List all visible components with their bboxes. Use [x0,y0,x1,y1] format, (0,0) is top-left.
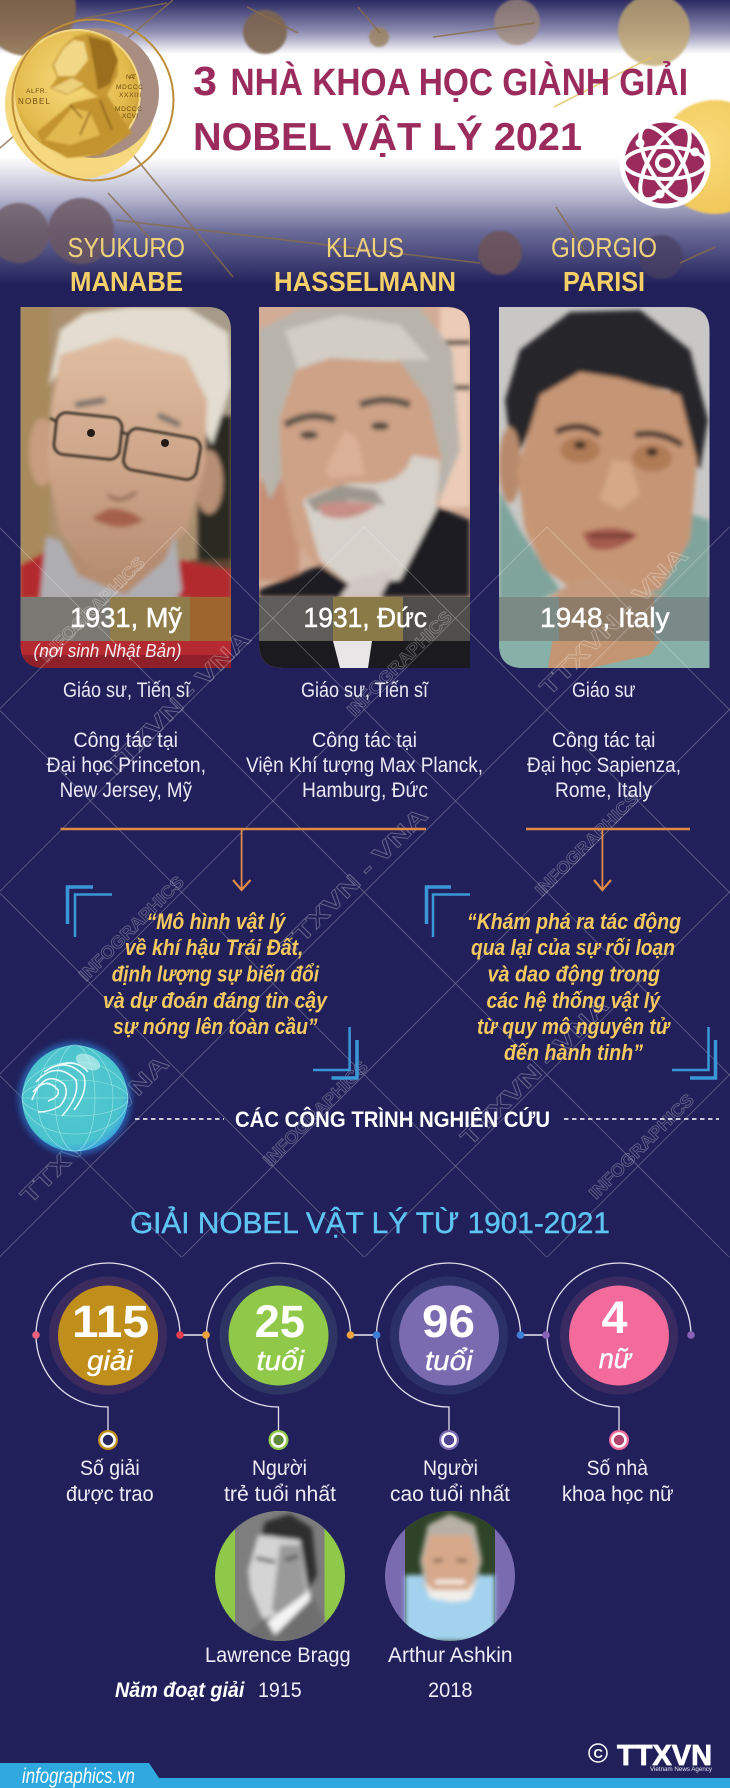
icon: atom [620,118,710,208]
text: INFOGRAPHICS [531,789,642,900]
quote: Parisi citation: đến hành tinh” [504,1040,643,1065]
quote brackets [426,887,716,1078]
stat: oldest 96: tuổi [425,1345,473,1376]
header band with gradient and gold molecules [0,0,730,285]
caption: 2018: 2018 [428,1679,472,1702]
quote: Parisi citation: qua lại của sự rối loạn [471,935,675,960]
text block: Parisi affiliation: Đại học Sapienza, [527,754,681,777]
text block: Hasselmann affiliation: Hamburg, Đức [302,779,428,802]
medal relief: Alfred Nobel bust [37,33,132,158]
name: Klaus Hasselmann [274,232,456,297]
quote: Parisi citation: các hệ thống vật lý [486,988,662,1013]
heading: research works: CÁC CÔNG TRÌNH NGHIÊN CỨU [235,1107,550,1132]
quote: Manabe and Hasselmann citation: và dự đoán đáng tin cậy [103,988,329,1013]
medal inscriptions: NOBEL [18,97,51,106]
text block: Parisi affiliation [527,679,681,802]
text block: Parisi affiliation: Công tác tại [552,729,656,752]
icon: Nobel medal [5,20,174,180]
stat: 4 women: khoa học nữ [562,1483,674,1506]
stat: youngest 25: tuổi [256,1345,305,1376]
text: TTXVN - VNA [97,625,256,784]
text: TTXVN - VNA [274,802,433,961]
name: Klaus Hasselmann: HASSELMANN [274,266,456,297]
logo: TTXVN copyright: TTXVN [617,1740,712,1772]
photo: Arthur Ashkin [385,1511,515,1641]
name: Syukuro Manabe: MANABE [70,266,183,297]
stat: 4 women: Số nhà [587,1457,648,1480]
birth year: Hasselmann: 1931, Đức [304,602,427,633]
medal inscriptions: XXXIII [119,92,141,99]
photo: Syukuro Manabe [20,307,232,669]
stat: youngest 25: 25 [255,1296,305,1347]
text block: Hasselmann affiliation [246,679,483,802]
title [193,58,688,159]
birth note: Manabe: (nơi sinh Nhật Bản) [34,641,182,661]
quote: Parisi citation: từ quy mô nguyên tử [477,1014,671,1039]
stat: 115 prizes: Số giải [80,1457,140,1480]
text block: Manabe affiliation: Đại học Princeton, [46,754,206,777]
stat: youngest 25 [202,1263,354,1506]
text: INFOGRAPHICS [585,1090,698,1203]
text: INFOGRAPHICS [36,553,149,666]
medal inscriptions [18,74,143,120]
stat: 115 prizes: giải [87,1345,134,1376]
caption: 1915: 1915 [258,1679,302,1702]
text block: Parisi affiliation: Rome, Italy [555,779,652,802]
name: Syukuro Manabe [68,232,185,297]
text block: Hasselmann affiliation: Giáo sư, Tiến sĩ [301,679,429,702]
stat: 115 prizes: được trao [66,1483,154,1506]
photo: Klaus Hasselmann [259,307,471,669]
arrow: Manabe and Hasselmann to shared citation [60,829,426,890]
stat: 115 prizes [32,1263,184,1506]
text block: Manabe affiliation: Công tác tại [74,729,178,752]
footer bar [0,1763,730,1788]
medal inscriptions: XCVI [122,113,138,120]
medal inscriptions: MDCCC [116,84,143,91]
stat: youngest 25: Người [252,1457,307,1480]
stat: youngest 25: trẻ tuổi nhất [224,1483,336,1506]
medal inscriptions: NAT [126,74,136,81]
photo: Giorgio Parisi [499,307,711,669]
text: INFOGRAPHICS [343,607,456,720]
quote: Manabe and Hasselmann citation: “Mô hình vật lý [147,909,287,934]
medal inscriptions: ALFR. [26,88,47,95]
quote: Parisi citation [426,887,716,1078]
stat: oldest 96: 96 [422,1296,475,1347]
text block: Hasselmann affiliation: Viện Khí tượng Max Planck, [246,754,483,777]
text block: Manabe affiliation: Giáo sư, Tiến sĩ [63,679,191,702]
text: INFOGRAPHICS [75,872,188,985]
name: Klaus Hasselmann: KLAUS [326,232,404,263]
arrow: Parisi to citation [526,829,690,890]
quote: Manabe and Hasselmann citation: định lượng sự biến đổi [112,962,320,986]
photo: Lawrence Bragg [215,1511,345,1641]
logo: TTXVN copyright: C [594,1746,604,1761]
stat: oldest 96 [373,1263,524,1506]
birth year: Parisi: 1948, Italy [540,602,670,633]
caption: award year label: Năm đoạt giải [115,1679,245,1702]
stat: 4 women: nữ [599,1343,633,1374]
text block: Parisi affiliation: Giáo sư [572,679,636,702]
title: 3 [193,58,217,104]
name: Giorgio Parisi: PARISI [563,266,645,297]
name: Giorgio Parisi: GIORGIO [551,232,657,263]
stat: oldest 96: Người [423,1457,478,1480]
heading: Nobel physics statistics: GIẢI NOBEL VẬT LÝ TỪ 1901-2021 [130,1206,610,1240]
text block: Manabe affiliation: New Jersey, Mỹ [60,779,192,802]
caption: Lawrence Bragg: Lawrence Bragg [205,1644,351,1667]
text: TTXVN - VNA [534,542,693,701]
name: Giorgio Parisi [551,232,657,297]
quote: Parisi citation: “Khám phá ra tác động [467,909,681,934]
medal inscriptions: MDCCC [115,106,142,113]
stat: oldest 96: cao tuổi nhất [390,1483,510,1506]
title: NOBEL VẬT LÝ 2021 [193,115,582,159]
quote brackets [68,887,357,1078]
quote: Manabe and Hasselmann citation [68,887,357,1078]
logo: TTXVN copyright: Vietnam News Agency [650,1766,713,1773]
birth year: Manabe: 1931, Mỹ [70,602,182,633]
footer bar: infographics.vn [22,1765,135,1788]
text block: Hasselmann affiliation: Công tác tại [312,729,417,752]
caption: Arthur Ashkin: Arthur Ashkin [388,1644,513,1667]
text: TTXVN - VNA [15,1050,174,1209]
quote: Manabe and Hasselmann citation: sự nóng lên toàn cầu” [113,1014,318,1039]
text: TTXVN - VNA [455,992,614,1151]
name: Syukuro Manabe: SYUKURO [68,232,185,263]
stat: 4 women [542,1263,695,1506]
quote: Manabe and Hasselmann citation: về khí hậu Trái Đất, [125,935,304,960]
icon: fingerprint globe [18,1042,132,1156]
text block: Manabe affiliation [46,679,206,802]
text: INFOGRAPHICS [259,1057,372,1170]
quote: Parisi citation: và dao động trong [488,962,660,986]
stat: 4 women: 4 [602,1292,628,1343]
stat: 115 prizes: 115 [72,1296,149,1347]
